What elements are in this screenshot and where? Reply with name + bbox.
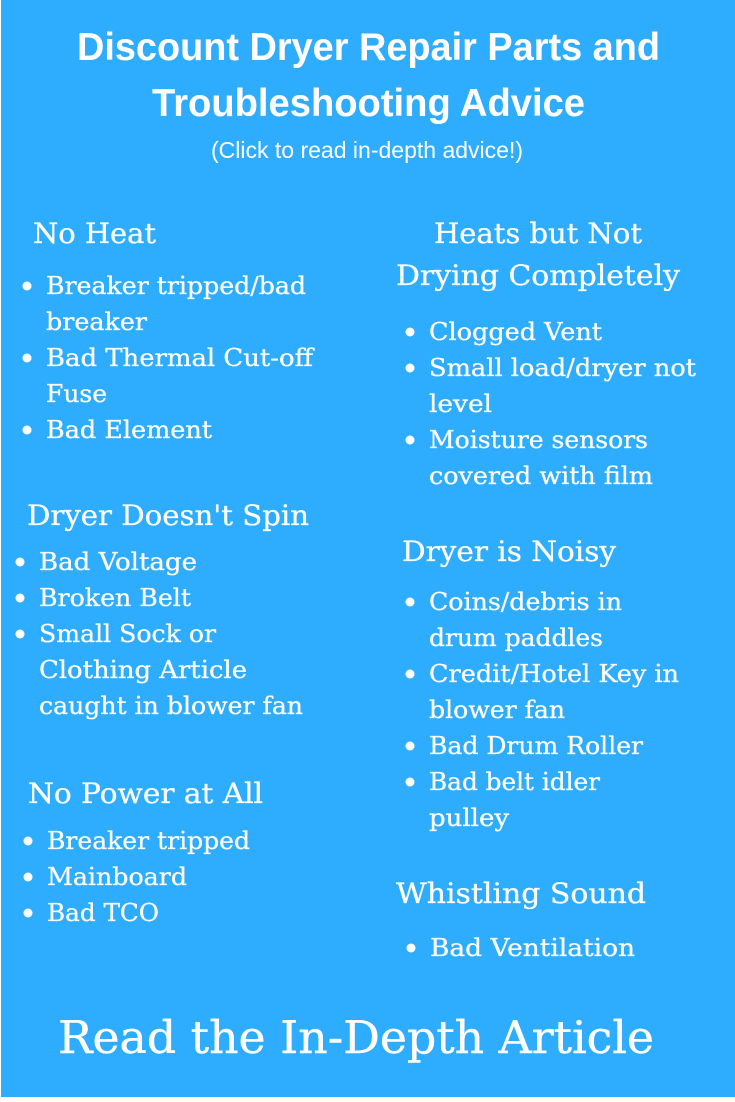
list: heats but not drying causes: Small load/dryer not — [429, 354, 696, 382]
list: heats but not drying causes — [406, 318, 696, 490]
list: no power causes: Mainboard — [47, 863, 187, 891]
list: no heat causes — [22, 272, 315, 444]
list: dryer is noisy causes: drum paddles — [429, 624, 603, 652]
heading: dryer doesn't spin: Dryer Doesn't Spin — [27, 499, 309, 532]
list: heats but not drying causes: level — [429, 390, 492, 418]
list: dryer is noisy causes: Credit/Hotel Key in — [429, 660, 679, 688]
panel: dryer is noisy — [402, 535, 679, 832]
panel: no heat — [22, 217, 315, 444]
panel: dryer doesn't spin — [16, 499, 309, 720]
heading: heats but not drying completely — [396, 217, 680, 292]
list: dryer doesn't spin causes — [16, 548, 303, 720]
panel: whistling sound — [396, 877, 646, 962]
heading: heats but not drying completely: Heats but Not — [434, 217, 643, 250]
call to action: Read the In-Depth Article — [58, 1011, 654, 1064]
heading: whistling sound: Whistling Sound — [396, 877, 646, 910]
list: no power causes: Bad TCO — [47, 899, 159, 927]
list: no heat causes: Bad Element — [46, 416, 212, 444]
heading: no power at all: No Power at All — [28, 777, 263, 810]
list: dryer doesn't spin causes: Broken Belt — [39, 584, 191, 612]
list: heats but not drying causes: Clogged Vent — [429, 318, 602, 346]
heading: no heat: No Heat — [33, 217, 157, 250]
list: heats but not drying causes: Moisture sensors — [429, 426, 648, 454]
list: dryer doesn't spin causes: caught in blower fan — [39, 692, 303, 720]
title: Troubleshooting Advice — [152, 82, 585, 125]
heading: heats but not drying completely: Drying Completely — [396, 259, 680, 292]
panel: heats but not drying — [396, 217, 696, 490]
subtitle: (Click to read in-depth advice!) — [211, 137, 523, 163]
list: no heat causes: breaker — [46, 308, 148, 336]
list: no heat causes: Fuse — [46, 380, 107, 408]
list: no power causes — [24, 827, 250, 927]
list: no heat causes: Bad Thermal Cut-off — [46, 344, 315, 372]
list: no heat causes: Breaker tripped/bad — [46, 272, 306, 300]
list: no power causes: Breaker tripped — [47, 827, 250, 855]
list: heats but not drying causes: covered with film — [429, 462, 653, 490]
heading: dryer is noisy: Dryer is Noisy — [402, 535, 616, 568]
list: dryer is noisy causes: Bad belt idler — [429, 768, 601, 796]
title — [77, 26, 660, 125]
list: whistling sound causes: Bad Ventilation — [430, 934, 635, 962]
list: dryer is noisy causes: pulley — [429, 804, 509, 832]
title: Discount Dryer Repair Parts and — [77, 26, 660, 69]
list: dryer is noisy causes: blower fan — [429, 696, 565, 724]
panel: no power at all — [24, 777, 263, 927]
list: dryer is noisy causes: Bad Drum Roller — [429, 732, 644, 760]
list: dryer is noisy causes — [406, 588, 679, 832]
list: dryer is noisy causes: Coins/debris in — [429, 588, 622, 616]
list: dryer doesn't spin causes: Clothing Article — [39, 656, 247, 684]
list: dryer doesn't spin causes: Small Sock or — [39, 620, 217, 648]
list: dryer doesn't spin causes: Bad Voltage — [39, 548, 197, 576]
